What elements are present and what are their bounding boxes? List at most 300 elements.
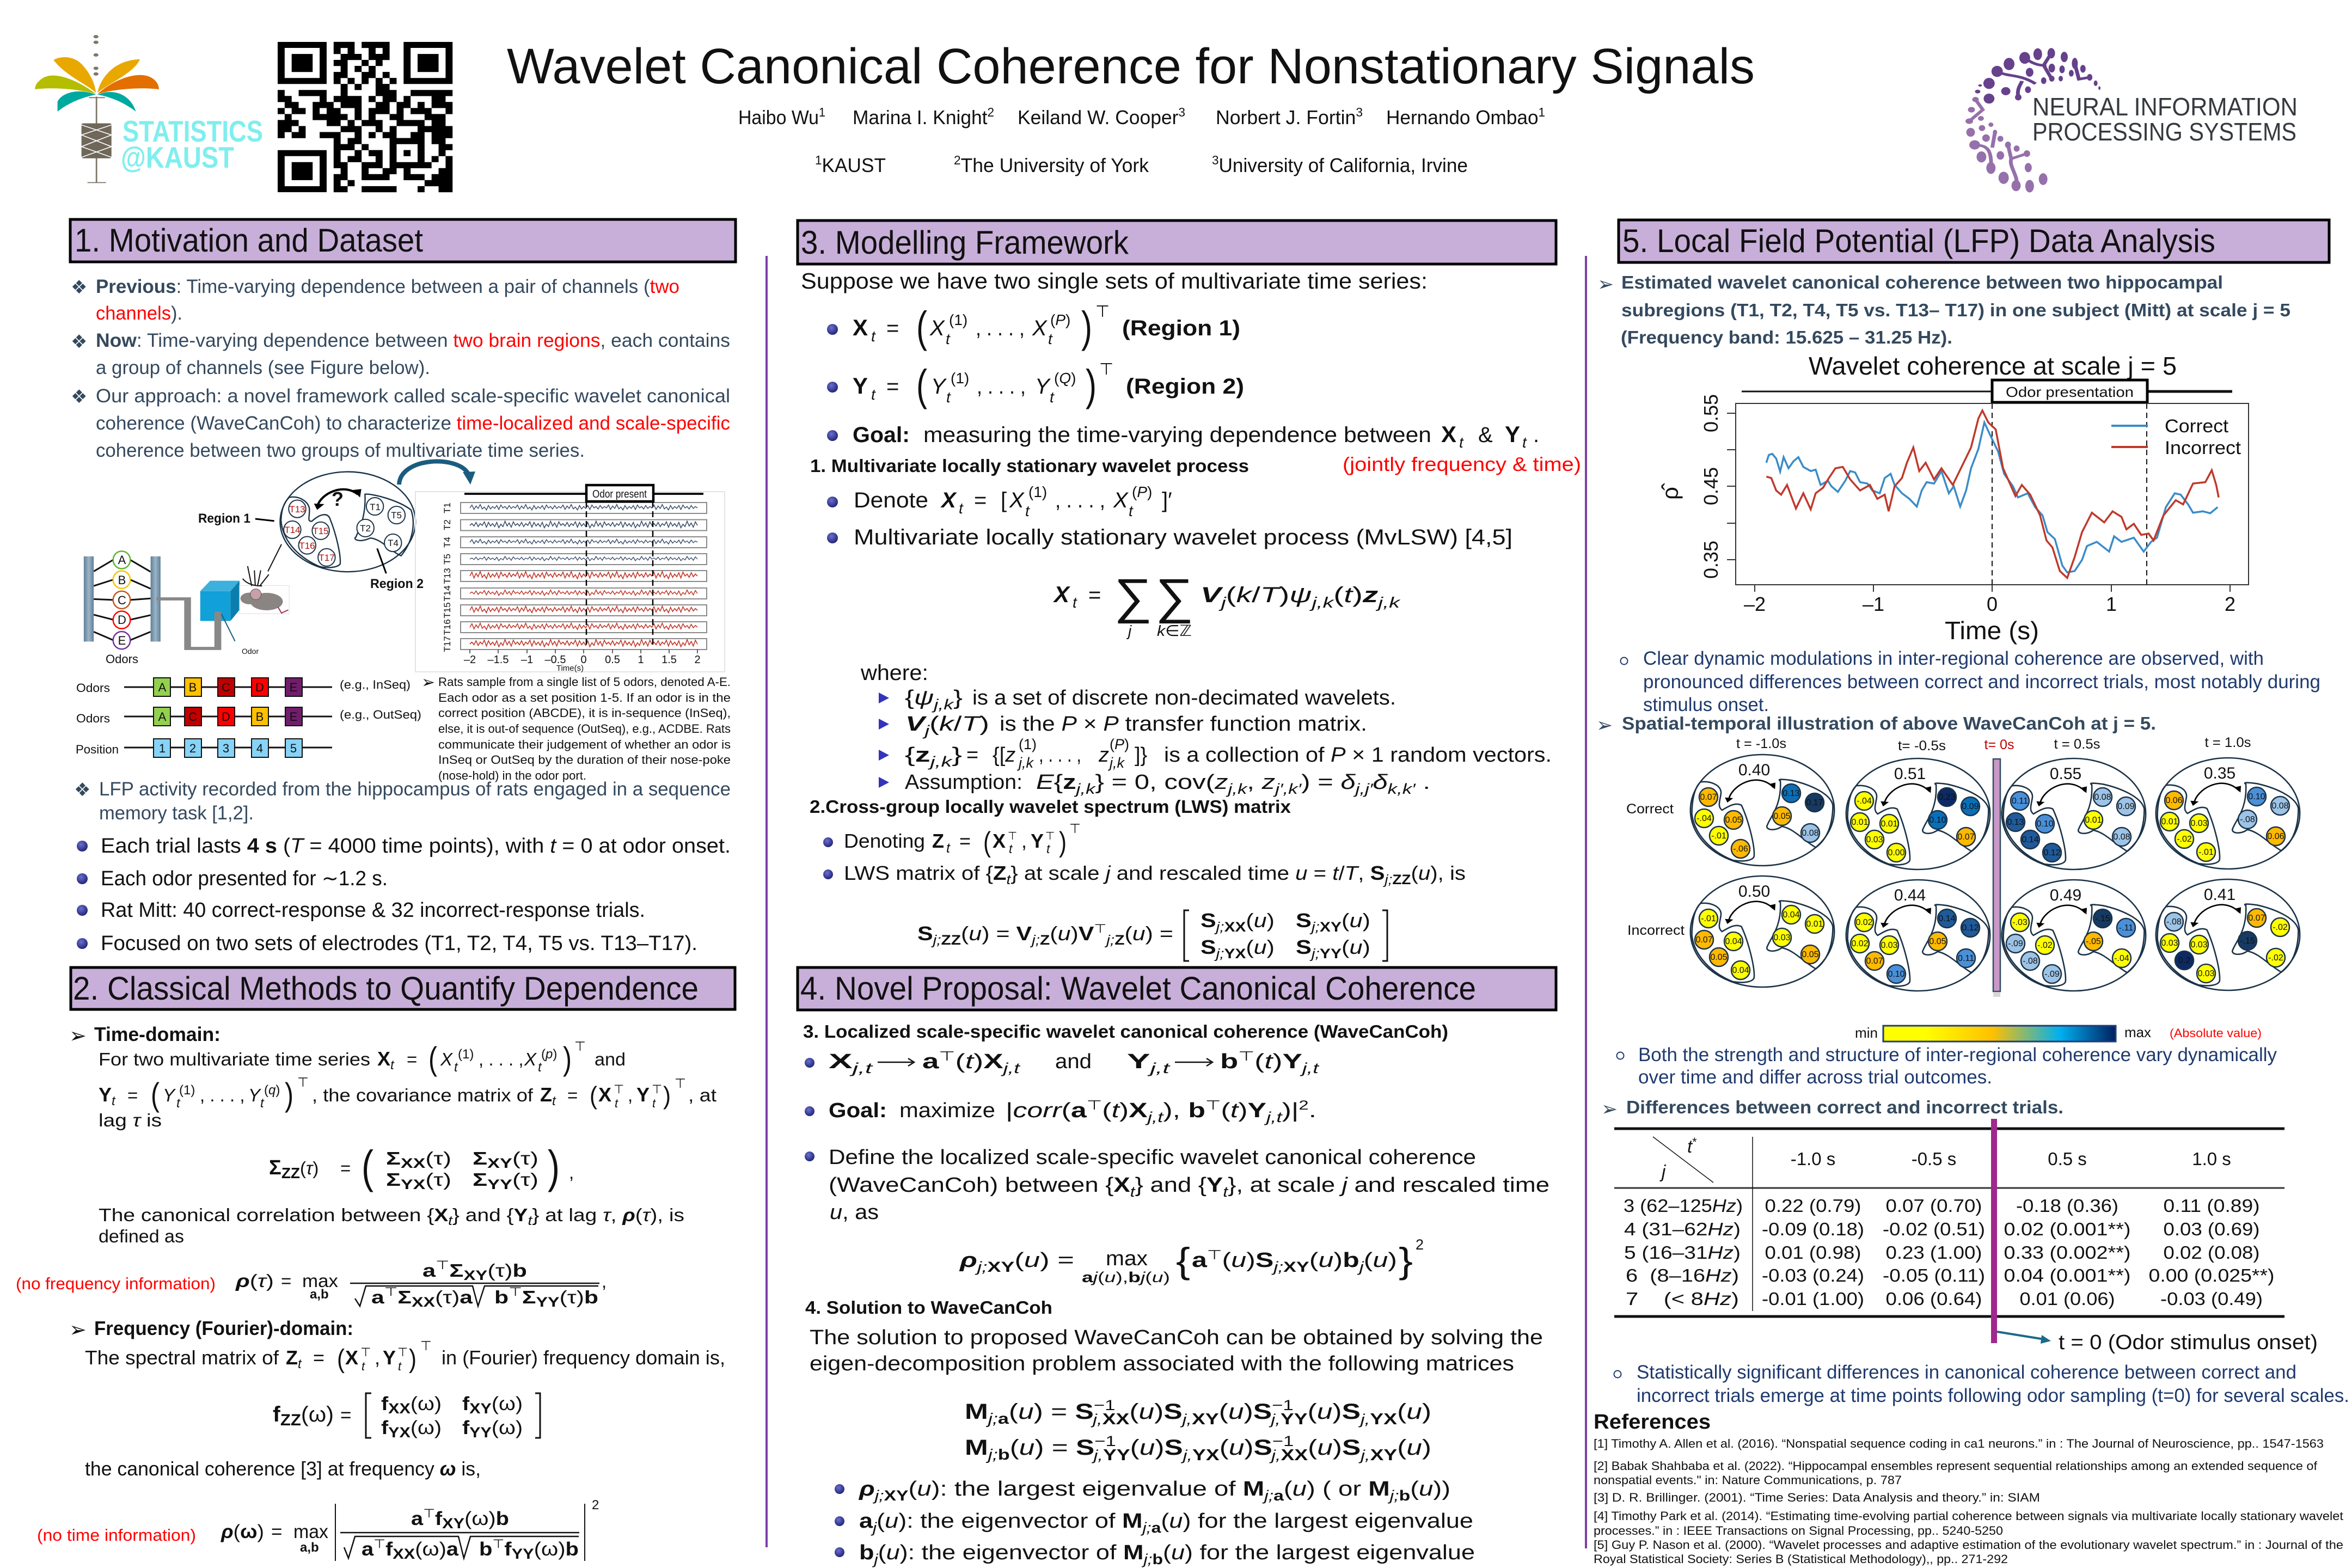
list: eigen-decomposition results: j <box>872 1551 879 1567</box>
equation: X_t region 1: ( <box>916 303 927 351</box>
equation: canonical correlation, no frequency information: a <box>460 1287 470 1307</box>
math text: time-domain definitions <box>99 1039 716 1130</box>
equation: projections: and <box>1055 1050 1092 1073</box>
text: LWS matrix definition: } at scale <box>1010 862 1106 884</box>
brain map: correct t=1.0 value 0.35: -.08 <box>2240 815 2255 824</box>
equations: M matrices: −1 <box>1094 1433 1116 1449</box>
text: denote X_t: , . . . , <box>1055 488 1105 512</box>
brain map: correct t=-1.0 value 0.40: 0.13 <box>1783 789 1800 798</box>
heading 5: 5. Local Field Potential (LFP) Data Analysis <box>1622 223 2215 259</box>
text: canonical correlation: } at lag <box>532 1205 603 1225</box>
text: where list: k,k′ <box>1388 781 1416 797</box>
text: denoting Z_t: ⊤ <box>1069 822 1081 836</box>
text: where list: j′,k′ <box>1272 781 1302 797</box>
equation: canonical correlation, no frequency information: Σ <box>449 1260 463 1281</box>
text: goal: measuring the time-varying dependence between <box>923 423 1431 447</box>
list: eigen-decomposition results: b <box>1399 1487 1410 1504</box>
authors: Marina I. Knight <box>853 106 990 128</box>
motivation bullet text: ❖ <box>71 387 87 407</box>
equation: Y_t region 2: Y <box>931 375 947 399</box>
equation: X_t region 1: (P) <box>1050 311 1070 328</box>
equation: WaveCanCoh: XY <box>988 1259 1014 1275</box>
annotation: odor stimulus onset: t = 0 (Odor stimulus onset) <box>2059 1331 2318 1354</box>
text: denoting Z_t: t <box>1046 842 1051 856</box>
x axis labels: 0 <box>1987 593 1998 615</box>
equation: WaveCanCoh <box>959 1236 1424 1285</box>
figure: odor delivery apparatus and rat: E <box>118 634 126 647</box>
equation: canonical coherence, no time information: ρ(ω) <box>220 1521 264 1542</box>
equations: M matrices: j; <box>985 1446 998 1463</box>
equations: M matrices: ( <box>1308 1400 1318 1424</box>
text: define WaveCanCoh: t <box>1223 1184 1229 1200</box>
math text: time-domain definitions: , the covariance matrix of <box>312 1085 534 1105</box>
math text: time-domain definitions: (1) <box>179 1083 195 1098</box>
text: define WaveCanCoh <box>805 1146 1549 1224</box>
text: where list: Assumption: <box>905 771 1022 794</box>
brain map: incorrect t=1.0 value 0.41: 0.03 <box>2161 939 2178 948</box>
math text: time-domain definitions: (q) <box>264 1083 280 1098</box>
x axis labels: –2 <box>1744 593 1766 615</box>
text: statistically significant: incorrect trials emerge at time points following odor sampling (t=0) for several scales. <box>1637 1385 2349 1406</box>
motivation bullet text: a group of channels (see Figure below). <box>96 357 430 378</box>
chart: channel LFP signals: T17 <box>442 636 452 652</box>
equations: M matrices: j, <box>1180 1411 1192 1428</box>
equation: canonical correlation, no frequency information: a <box>371 1287 381 1307</box>
chart: channel LFP signals: –0.5 <box>545 654 566 666</box>
authors: 1 <box>819 105 825 119</box>
brain map: correct t=-0.5 value 0.51: 0.51 <box>1894 765 1926 783</box>
line: incorrect trials <box>1766 411 2219 578</box>
list: eigen-decomposition results: j; <box>1141 1551 1152 1567</box>
heading 1 <box>70 219 736 262</box>
equation: projections: b <box>1220 1050 1238 1073</box>
text: define WaveCanCoh: } and { <box>1135 1174 1206 1197</box>
brain map: correct t=-1.0 value 0.40: 0.17 <box>1806 798 1823 807</box>
equation: canonical correlation, no frequency information: ⊤ <box>509 1285 522 1298</box>
equation: covariance matrix: (τ) <box>425 1148 451 1168</box>
equation: spectral matrix: f <box>381 1417 388 1438</box>
figure: brain regions with tetrodes: Region 1 <box>198 511 250 526</box>
brain map: incorrect t=1.0 value 0.41: -.02 <box>2268 953 2283 963</box>
text: MvLSW definition: Multivariate locally stationary wavelet process (MvLSW) [4,5] <box>854 525 1512 549</box>
list: eigen-decomposition results: u) for the largest eigenvalue <box>1169 1510 1428 1533</box>
brain map: incorrect t=1.0 value 0.41: 0.41 <box>2204 886 2235 904</box>
brain map: incorrect t=-1.0 value 0.50: 0.03 <box>1773 933 1791 942</box>
equation: canonical correlation, no frequency information: ρ(τ) <box>235 1271 274 1291</box>
text: estimated coherence description <box>1597 272 2290 347</box>
equation: canonical coherence, no time information: a,b <box>300 1540 319 1555</box>
equation: WaveCanCoh: ( <box>1309 1249 1319 1272</box>
math text: time-domain definitions: , . . . , <box>200 1085 245 1105</box>
list: eigen-decomposition results: a <box>1273 1487 1284 1504</box>
text: where list: (1) <box>1019 736 1037 752</box>
text: strength and structure: Both the strength and structure of inter-regional coherence vary dynamically <box>1638 1044 2277 1065</box>
equation: LWS matrix: Z <box>1114 933 1124 948</box>
equations: M matrices: ( <box>1397 1436 1407 1460</box>
brain map: correct t=0.5 value 0.55: 0.10 <box>2036 819 2054 829</box>
equation: WaveCanCoh: 2 <box>1416 1236 1424 1253</box>
equation: WaveCanCoh: u) <box>1373 1249 1395 1272</box>
equations: M matrices: ( <box>1010 1436 1020 1460</box>
equations: M matrices: j, <box>1180 1447 1192 1463</box>
equation: covariance matrix: Σ <box>386 1169 397 1190</box>
text: define WaveCanCoh: (WaveCanCoh) between { X <box>829 1174 1128 1197</box>
equation: X_t region 1: ⊤ <box>1095 303 1110 321</box>
figure: brain regions with tetrodes: Region 2 <box>370 577 424 591</box>
equations: M matrices: u)S <box>1317 1400 1356 1424</box>
text: goal: t <box>1459 434 1464 451</box>
equation: canonical coherence, no time information: f <box>435 1508 443 1529</box>
equation: LWS matrix: S <box>1200 909 1216 932</box>
text: task description: correct position (ABCDE), it is in-sequence (InSeq), <box>438 706 731 720</box>
list: eigen-decomposition results: u): the eigenvector of M <box>886 1541 1141 1564</box>
table: differences between correct and incorrect trials: 0.02 (0.001**) <box>2004 1219 2131 1239</box>
text: canonical correlation: } and { <box>452 1205 514 1225</box>
brain map: incorrect t=-1.0 value 0.50: 0.04 <box>1783 910 1800 920</box>
text: denoting Z_t: Z <box>932 830 944 852</box>
math text: time-domain definitions: ( <box>590 1081 598 1110</box>
equation: canonical coherence, no time information: b <box>496 1508 507 1529</box>
text: estimated coherence description: Estimated wavelet canonical coherence between two hippocampal <box>1621 272 2223 292</box>
brain map: incorrect t=0.5 value 0.49: -.04 <box>2114 954 2129 963</box>
equation: Y_t region 2: t <box>1050 389 1055 406</box>
authors: Norbert J. Fortin <box>1216 106 1357 128</box>
equation: X_t region 1: ) <box>1081 303 1092 351</box>
math text: time-domain definitions: t <box>538 1060 542 1075</box>
subheading: time domain: Time-domain: <box>94 1023 220 1045</box>
math text: time-domain definitions: , . . . , <box>479 1049 524 1069</box>
brain map: correct t=1.0 value 0.35: -.02 <box>2177 835 2192 844</box>
motivation bullet text: ❖ <box>71 277 87 298</box>
chart: channel LFP signals: –1 <box>521 654 533 666</box>
text: denote X_t: = <box>974 488 987 512</box>
references <box>1594 1411 2343 1566</box>
diagram: odor sequences: 1 <box>159 742 166 755</box>
text: estimated coherence description: (Frequency band: 15.625 – 31.25 Hz). <box>1621 327 1952 347</box>
equation: canonical coherence, no time information: a <box>446 1539 457 1560</box>
column divider 2 <box>1585 256 1587 1548</box>
brain map: incorrect t=0.5 value 0.49: -.09 <box>2044 970 2060 979</box>
list: eigen-decomposition results: j; <box>1261 1487 1273 1504</box>
equation: LWS matrix: u)V <box>1058 922 1092 945</box>
chart: channel LFP signals: –2 <box>464 654 476 666</box>
time labels for brain maps: t = -1.0s <box>1736 736 1786 751</box>
text: denote X_t: t <box>1025 503 1030 519</box>
equation: LWS matrix: ( <box>1124 922 1132 945</box>
diagram: odor sequences: Odors <box>76 712 110 725</box>
text: goal maximize: ⊤ <box>1205 1098 1221 1113</box>
equation: spectral matrix: XX <box>388 1400 411 1417</box>
list: eigen-decomposition results: b <box>1152 1551 1163 1567</box>
equation: canonical correlation, no frequency information: a,b <box>310 1287 329 1302</box>
brain map: correct t=-0.5 value 0.51: 0.01 <box>1851 818 1869 827</box>
text: spectral matrix: t <box>398 1359 402 1373</box>
text: spectral matrix: X <box>345 1346 358 1369</box>
subheading: differences: ➢ <box>1601 1098 1618 1120</box>
math text: time-domain definitions: ⊤ <box>574 1039 586 1054</box>
logo: NeurIPS <box>1965 48 2298 192</box>
figure: odor delivery apparatus and rat <box>84 544 289 666</box>
text: LFP activity: LFP activity recorded from the hippocampus of rats engaged in a sequence <box>99 779 731 800</box>
text: clear dynamic modulations: stimulus onset. <box>1643 694 1769 715</box>
math text: time-domain definitions: = <box>407 1049 417 1069</box>
text: denote X_t: X <box>1009 488 1025 512</box>
time labels for brain maps: t = 0.5s <box>2054 737 2100 752</box>
brain map: correct t=1.0 value 0.35: 0.08 <box>2271 801 2289 811</box>
equations: M matrices <box>965 1397 1431 1464</box>
list: eigen-decomposition results: j; <box>1140 1520 1152 1536</box>
text: task description: Each odor as a set position 1-5. If an odor is in the <box>438 691 731 705</box>
authors: Haibo Wu <box>738 106 824 128</box>
equation: canonical coherence, no time information: 2 <box>592 1498 599 1512</box>
brain map: correct t=-1.0 value 0.40: -.06 <box>1733 844 1748 854</box>
diagram: odor sequences: A <box>158 710 167 724</box>
brain map: incorrect t=-0.5 value 0.44: 0.14 <box>1938 914 1956 923</box>
equation: LWS matrix: u) = V <box>969 922 1029 945</box>
equations: M matrices: −1 <box>1272 1397 1294 1413</box>
diagram: odor sequences: 4 <box>256 742 263 755</box>
equation: canonical correlation, no frequency information: XY <box>463 1268 488 1283</box>
equation: LWS matrix: u) = <box>1132 922 1169 945</box>
text: task description: ➢ <box>421 673 435 691</box>
text: goal maximize: ⊤ <box>1087 1098 1102 1113</box>
equations: M matrices: M <box>965 1400 988 1424</box>
equation: LWS matrix: XY <box>1320 920 1342 935</box>
figure: brain regions with tetrodes: T2 <box>360 523 371 534</box>
equation: Y_t region 2: Y <box>1035 375 1051 399</box>
chart: channel LFP signals: 1.5 <box>661 654 677 666</box>
equation: MvLSW: t <box>1073 594 1077 611</box>
equations: M matrices: YY <box>1281 1411 1308 1428</box>
diagram: odor sequences: D <box>222 710 230 724</box>
equation: projections: j,t <box>1000 1060 1021 1076</box>
equation: covariance matrix: , <box>569 1162 574 1183</box>
brain map: incorrect t=1.0 value 0.41: -.15 <box>2240 936 2255 946</box>
text: solution description: eigen-decomposition problem associated with the following matrices <box>810 1352 1514 1375</box>
list: eigen-decomposition results: b <box>859 1541 874 1564</box>
text: task description: InSeq or OutSeq by the duration of their nose-poke <box>438 753 731 767</box>
references: References <box>1594 1411 1711 1434</box>
brain map: correct t=-0.5 value 0.51: 0.09 <box>1962 802 1979 811</box>
table: differences between correct and incorrect trials: 0.5 s <box>2048 1149 2087 1169</box>
chart: channel LFP signals: Time(s) <box>556 664 584 673</box>
equation: projections: j,t <box>1147 1060 1171 1076</box>
equation: projections: ( <box>955 1050 965 1073</box>
equations: M matrices: u) <box>1406 1436 1429 1460</box>
equation: WaveCanCoh: u) = <box>1024 1249 1065 1272</box>
text: strength and structure: over time and differ across trial outcomes. <box>1638 1067 1992 1088</box>
equation: LWS matrix: u) <box>1254 936 1273 958</box>
equation: canonical coherence, no time information: XX <box>393 1546 415 1562</box>
text: spectral matrix: = <box>313 1346 324 1369</box>
text: goal: Goal: <box>853 423 910 447</box>
table: differences between correct and incorrect trials: t <box>1687 1136 1692 1156</box>
equation: LWS matrix: j; <box>1309 946 1320 961</box>
text: where list: ( <box>929 713 939 736</box>
affiliations: University of California, Irvine <box>1219 154 1468 176</box>
text: LWS matrix definition: ( <box>1411 862 1418 884</box>
text: denoting Z_t: Y <box>1031 830 1044 852</box>
text: estimated coherence description: subregions (T1, T2, T4, T5 vs. T13– T17) in one subject (Mitt) at scale j = 5 <box>1621 300 2290 320</box>
equation: canonical coherence, no time information <box>37 1498 599 1562</box>
brain map: incorrect t=-0.5 value 0.44: 0.10 <box>1888 970 1905 979</box>
equation: LWS matrix: j; <box>1309 920 1320 935</box>
list: eigen-decomposition results: a <box>1152 1520 1162 1536</box>
text: where list: z <box>1098 744 1109 767</box>
brain map: incorrect t=-0.5 value 0.44: 0.03 <box>1881 941 1898 950</box>
math text: time-domain definitions: X <box>440 1049 454 1069</box>
text: canonical correlation: t <box>448 1214 454 1228</box>
equation: WaveCanCoh: ( <box>1014 1249 1024 1272</box>
equation: projections: ⊤ <box>1238 1049 1254 1064</box>
equation: LWS matrix: ZZ <box>941 933 961 948</box>
text: where list: δ <box>1373 771 1388 794</box>
brain map: incorrect t=0.5 value 0.49: -.15 <box>2095 914 2110 923</box>
brain map: correct t=-1.0 value 0.40 <box>1690 755 1834 866</box>
brain map: correct t=-1.0 value 0.40: 0.07 <box>1700 793 1717 802</box>
authors: 3 <box>1178 105 1185 119</box>
text: LWS matrix definition: u), is <box>1418 862 1462 884</box>
equation: projections: X <box>829 1050 853 1073</box>
math text: time-domain definitions: t <box>390 1058 395 1073</box>
text: denote X_t: X <box>940 488 957 512</box>
equation: X_t region 1: X <box>853 315 868 340</box>
math text: time-domain definitions: Y <box>163 1085 176 1105</box>
equation: projections: ⊤ <box>939 1049 955 1064</box>
equation: WaveCanCoh: { <box>1176 1240 1190 1281</box>
diagram: odor sequences: Position <box>76 743 119 756</box>
equation: canonical coherence, no time information: ⊤ <box>492 1537 504 1551</box>
equations: M matrices: XX <box>1102 1411 1130 1428</box>
list: eigen-decomposition results: j; <box>1387 1487 1399 1504</box>
equation: LWS matrix <box>917 909 1387 961</box>
x axis labels: 2 <box>2225 593 2235 615</box>
text: define WaveCanCoh: j and rescaled time <box>1342 1174 1516 1197</box>
list: dataset facts: Rat Mitt: 40 correct-response & 32 incorrect-response trials. <box>101 899 645 922</box>
text: where list: z <box>1261 771 1275 794</box>
affiliations: The University of York <box>961 154 1149 176</box>
text: goal maximize: t)Y <box>1230 1099 1261 1122</box>
equation: Y_t region 2: Y <box>853 373 868 399</box>
text: where list: z <box>1214 771 1228 794</box>
text: canonical coherence intro: the canonical coherence [3] at frequency ω is, <box>85 1457 481 1480</box>
equation: spectral matrix: (ω) <box>492 1417 523 1438</box>
brain map: incorrect t=0.5 value 0.49: -.05 <box>2086 937 2101 946</box>
equation: canonical correlation, no frequency information: (τ) <box>435 1287 460 1307</box>
equations: M matrices: −1 <box>1272 1433 1294 1449</box>
math text: time-domain definitions: lag τ is <box>99 1110 162 1130</box>
text: estimated coherence description: ➢ <box>1597 273 1614 295</box>
list: eigen-decomposition results: u) for the largest eigenvalue <box>1171 1541 1430 1564</box>
text: denote X_t: Denote <box>854 488 928 512</box>
text: clear dynamic modulations: Clear dynamic modulations in inter-regional coherence are observed, with <box>1643 648 2264 669</box>
equations: M matrices: −1 <box>1094 1397 1115 1413</box>
list: eigen-decomposition results: u): the largest eigenvalue of M <box>917 1478 1260 1500</box>
brain map: correct t=0.5 value 0.55 <box>2002 758 2146 869</box>
equation: spectral matrix <box>273 1393 540 1441</box>
text: spectral matrix: ⊤ <box>360 1345 371 1359</box>
equation: canonical correlation, no frequency information: b <box>512 1260 524 1281</box>
equation: X_t region 1: t <box>871 328 876 345</box>
figure: odor delivery apparatus and rat: A <box>118 553 126 567</box>
math text: time-domain definitions: Y <box>99 1083 112 1106</box>
equation: LWS matrix: ( <box>1246 909 1254 932</box>
y axis labels: 0.45 <box>1700 467 1722 505</box>
table: differences between correct and incorrect trials: 3 (62–125 Hz) <box>1624 1196 1743 1216</box>
brain map: incorrect t=-1.0 value 0.50: -.01 <box>1701 914 1716 923</box>
column divider 1 <box>765 256 768 1547</box>
equation: canonical correlation, no frequency information: , <box>602 1271 607 1291</box>
equation: spectral matrix: XY <box>469 1400 492 1417</box>
subheading: spatial-temporal illustration: Spatial-temporal illustration of above WaveCanCoh at j = 5. <box>1622 713 2156 733</box>
brain map: correct t=0.5 value 0.55: 0.09 <box>2117 802 2135 811</box>
equation: MvLSW: j <box>1126 622 1132 639</box>
equation: LWS matrix: u) <box>1349 909 1369 932</box>
logo: NeurIPS: PROCESSING SYSTEMS <box>2032 118 2296 146</box>
equation: X_t region 1: t <box>1048 330 1053 347</box>
math text: time-domain definitions: t <box>176 1096 181 1111</box>
math text: time-domain definitions: ( <box>428 1040 437 1077</box>
subheading: frequency domain: ➢ <box>69 1319 87 1342</box>
text: where list: is a collection of P × 1 random vectors. <box>1164 744 1552 767</box>
equations: M matrices: j, <box>1090 1411 1102 1428</box>
list: eigen-decomposition results: a <box>859 1510 873 1533</box>
text: where list: (P) <box>1110 736 1129 752</box>
equation: covariance matrix: = <box>340 1158 351 1178</box>
text: goal maximize: maximize <box>899 1099 995 1122</box>
text: intro: Suppose we have two single sets of multivariate time series: <box>801 268 1428 293</box>
subheading: time domain: ➢ <box>69 1025 87 1048</box>
brain map: incorrect t=-0.5 value 0.44: 0.05 <box>1929 937 1946 946</box>
math text: time-domain definitions: X <box>377 1048 390 1070</box>
text: denote X_t <box>827 483 1172 519</box>
list: eigen-decomposition results: u): the eigenvector of M <box>885 1510 1140 1533</box>
equations: M matrices: ( <box>1220 1436 1229 1460</box>
affiliations: 3 <box>1212 153 1219 167</box>
panel: 5. LFP Data Analysis <box>1594 220 2349 1566</box>
text: goal: X <box>1441 421 1456 447</box>
subheading: frequency domain: Frequency (Fourier)-domain: <box>94 1317 353 1339</box>
equation: projections: t)Y <box>1264 1050 1296 1073</box>
list: eigen-decomposition results: ( <box>877 1510 885 1533</box>
brain map: correct t=-0.5 value 0.51: 0.10 <box>1929 816 1946 825</box>
brain map: incorrect t=-1.0 value 0.50: 0.05 <box>1710 953 1728 962</box>
list: eigen-decomposition results: ( <box>1284 1478 1293 1500</box>
equation: covariance matrix: YX <box>401 1177 426 1192</box>
equation: MvLSW: t)z <box>1344 583 1374 607</box>
text: where list: ]} <box>1135 744 1147 767</box>
equation: Y_t region 2: t <box>871 386 876 403</box>
text: denote X_t: X <box>1113 488 1129 512</box>
equations: M matrices: XY <box>1370 1447 1397 1464</box>
text: where list: E{z <box>1036 771 1073 794</box>
text: goal maximize <box>805 1098 1316 1125</box>
subheading: LWS matrix: 2.Cross-group locally wavelet spectrum (LWS) matrix <box>810 797 1291 817</box>
text: statistically significant <box>1614 1362 2349 1406</box>
brain map: incorrect t=-1.0 value 0.50: 0.50 <box>1738 883 1770 901</box>
brain map: incorrect t=0.5 value 0.49: -.11 <box>2119 923 2133 933</box>
text: LWS matrix definition: j; <box>1383 872 1392 887</box>
references: [2] Babak Shahbaba et al. (2022). “Hippocampal ensembles represent sequential relationships among an extended sequence of <box>1594 1459 2318 1473</box>
arrow: t=0 marker <box>1997 1332 2051 1344</box>
text: where list: j,j′ <box>1352 781 1374 797</box>
motivation bullet text: coherence between two groups of multivariate time series. <box>96 440 585 461</box>
math text: time-domain definitions: , at <box>688 1085 716 1105</box>
equation: Y_t region 2: ( <box>916 361 927 409</box>
list: eigen-decomposition results: XY <box>884 1487 909 1504</box>
subheading: MvLSW process: 1. Multivariate locally stationary wavelet process <box>810 456 1249 476</box>
x axis labels <box>1744 593 2235 615</box>
